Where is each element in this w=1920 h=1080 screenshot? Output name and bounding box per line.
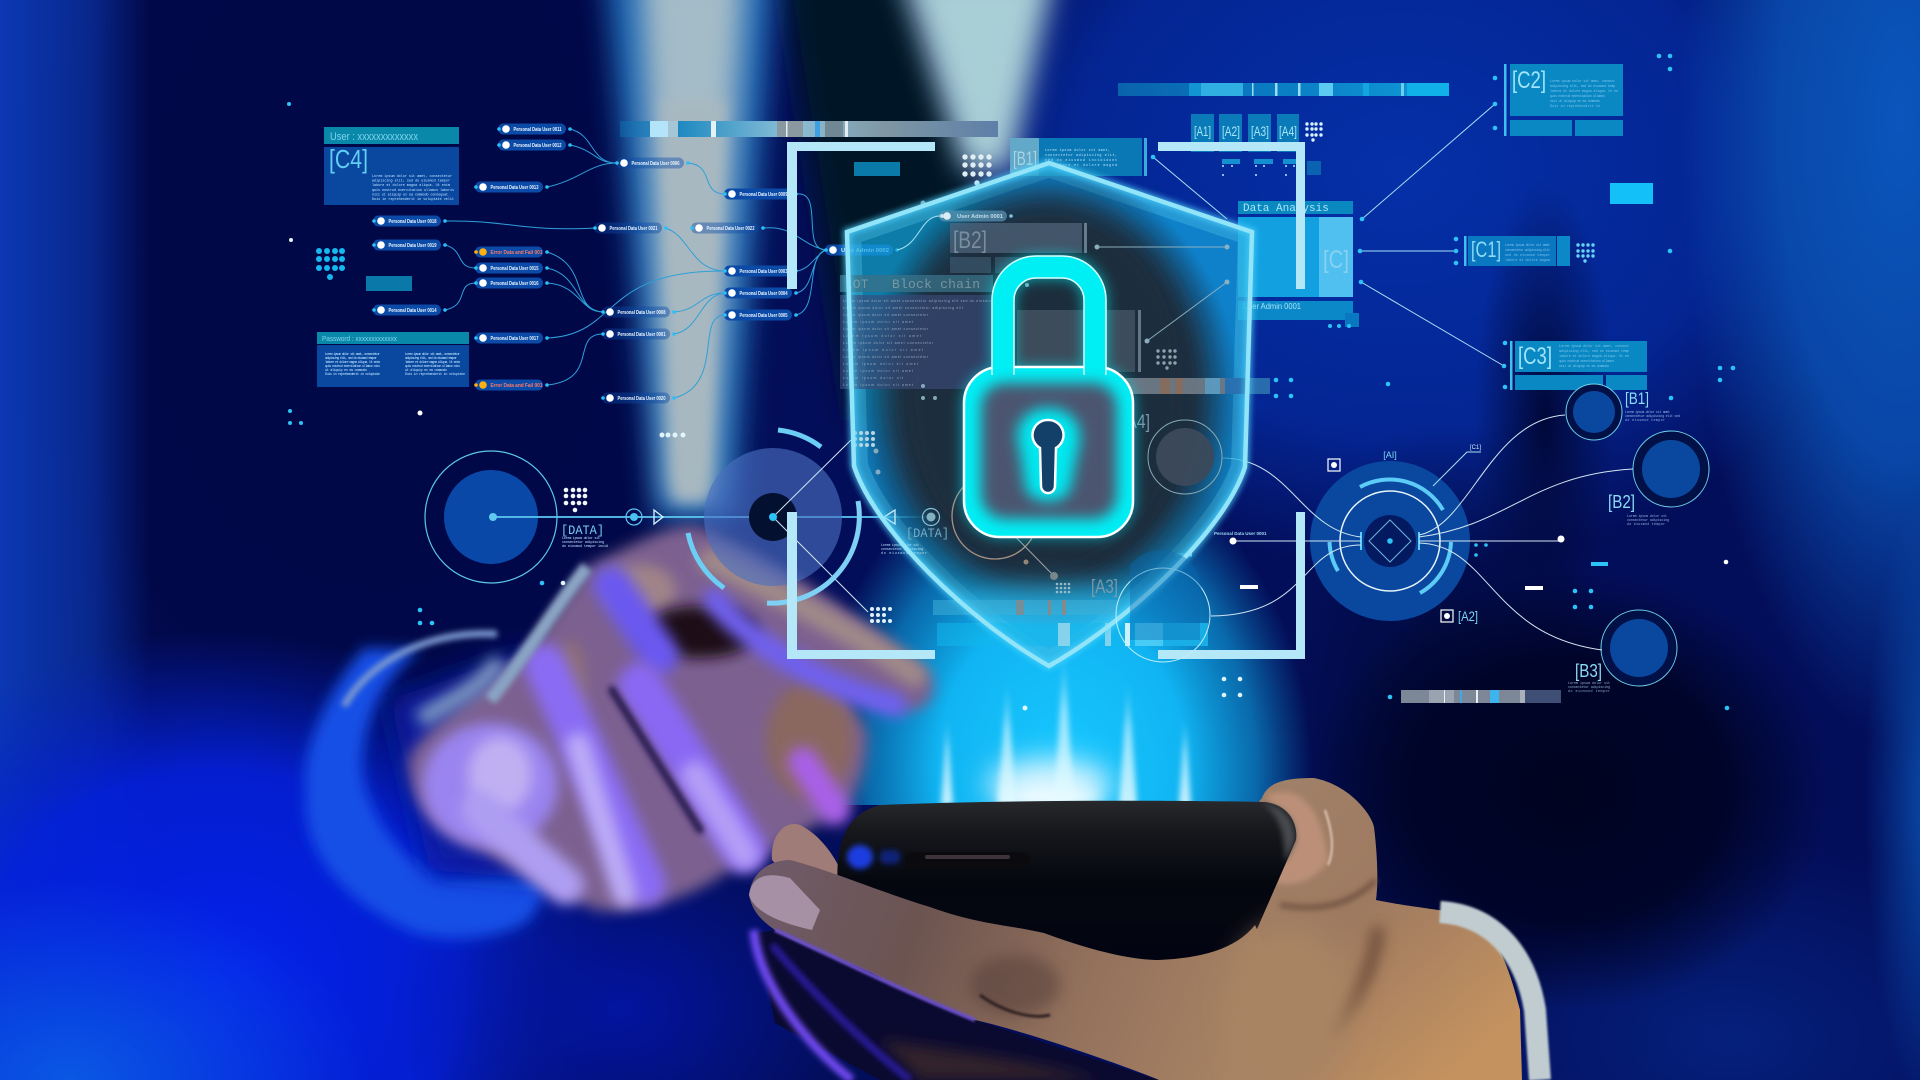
panel: C4 user: nisi ut aliquip ex ea commodo consequat. [372,192,450,198]
connector curves to B nodes: Personal Data User 0001 [1214,531,1267,536]
chart: node B2: [B2] [1608,492,1635,512]
chart: node B2: Lorem ipsum dolor sit [1627,514,1667,519]
labels: A1 to A4: [A4] [1279,123,1297,139]
padlock shackle [992,256,1106,374]
node: Error Data and Fail 001: Error Data and Fail 001 [490,250,542,256]
connector lines from data analysis [1151,104,1504,366]
panel: C2: nisi ut aliquip ex ea commodo [1550,99,1600,104]
chart: left target: Lorem ipsum dolor sit [562,536,600,541]
padlock body [964,367,1133,537]
node: Personal Data User 0005 [723,310,798,320]
connector lines inside shield [1095,245,1229,343]
panel: password: quis nostrud exercitation ullamco nisi [405,364,460,369]
panel: C4 user: labore et dolore magna aliqua. Ut enim [372,183,450,188]
node: Personal Data User 0019 [372,240,447,250]
dashes [1175,553,1608,590]
DATA label inside shield: [DATA] [906,526,949,541]
panel: B1: sed do eiusmod incididunt [1045,158,1117,163]
panel: A3 ghost [1017,310,1141,372]
panel: IoT Block chain: Lorem ipsum dolor sit amet consectetur [843,327,929,331]
panel: IoT Block chain: Lorem ipsum dolor sit amet consectetur [843,313,929,317]
chart: node B1: Lorem ipsum dolor sit amet [1625,410,1670,415]
panel: C2: quis nostrud exercitation ullamco [1550,94,1605,99]
node: Personal Data User 0014 [372,304,447,316]
chart: central target AI [1310,445,1481,621]
panel: IoT Block chain [840,275,1010,389]
padlock body interior [981,383,1117,519]
panel: Data Analysis [1238,201,1359,328]
bar: top right segmented [1118,83,1449,96]
panel: C3: quis nostrud exercitation ullamco [1559,359,1614,364]
node: Personal Data User 0012: Personal Data User 0012 [514,143,562,149]
shackle base patch [993,362,1105,380]
panel: C4 user: adipiscing elit, sed do eiusmod tempor [372,178,450,184]
panel: password: Duis in reprehenderit in voluptate [405,372,465,377]
chart: node B1: consectetur adipiscing elit sed [1625,414,1680,419]
panel: C1: [C1] [1471,237,1501,262]
labels: A1 to A4: [A3] [1251,123,1269,139]
panel: C3: nisi ut aliquip ex ea commodo [1559,364,1609,369]
panel: C4 user: Lorem ipsum dolor sit amet, consectetur [372,174,452,179]
DATA label inside shield: do eiusmod tempor [881,551,927,556]
chart: node B2: consectetur adipiscing [1627,518,1669,523]
panel: password: labore et dolore magna aliqua. Ut enim [325,360,380,365]
node: Personal Data User 0005: Personal Data User 0005 [740,313,788,319]
node: Personal Data User 0004: Personal Data User 0004 [740,291,788,297]
panel: C3 [1502,341,1647,390]
chart: central target AI: [C1] [1470,445,1481,451]
node: Personal Data User 0013: Personal Data User 0013 [490,185,538,191]
panel: B1: [B1] [1013,149,1037,170]
A3 circle and target [952,417,1118,598]
DATA label inside shield: Lorem ipsum dolor sit [881,543,919,548]
panel: C4 user: Duis in reprehenderit in voluptate velit [372,197,454,202]
panel: C1: labore et dolore magna [1505,258,1550,263]
panel: IoT Block chain: Lorem ipsum dolor sit amet consectetur [843,341,934,345]
DATA label inside shield [881,508,949,556]
bar: lower right segmented [1401,690,1561,703]
panel: C2: adipiscing elit, sed do eiusmod temp [1550,84,1615,89]
node: Personal Data User 0017: Personal Data User 0017 [490,336,538,342]
panel: C4 user: User : xxxxxxxxxxxxx [330,131,418,143]
panel: Data Analysis: [C] [1323,246,1349,274]
panel: password: Lorem ipsum dolor sit amet, consectetur [405,352,460,357]
padlock keyhole [1017,408,1080,501]
node: Personal Data User 0018 [372,216,447,226]
node: Personal Data User 0006: Personal Data User 0006 [632,161,680,167]
data node network [372,124,899,404]
panel: IoT Block chain: Block chain [892,277,980,292]
panel: B2 [950,223,1087,273]
left dot grid and block [287,102,422,425]
panel: C1: sed do eiusmod tempor [1505,253,1550,258]
panel: C3: Lorem ipsum dolor sit amet, consect [1559,344,1629,349]
A3 overlap circle [1116,550,1210,662]
panel: C2: [C2] [1512,67,1546,94]
dot grid left of shield [853,431,875,447]
panel: password [317,332,469,387]
panel: IoT Block chain: Lorem ipsum dolor sit amet consectetur adipiscing elit sed do eiusmod [843,299,993,303]
shield outline [847,163,1252,666]
node: Personal Data User 0008 [601,306,676,318]
node: Personal Data User 0006 [615,158,690,168]
node: Personal Data User 0001 [601,328,676,340]
labels: A1 to A4 [1191,114,1323,176]
panel: B1: Lorem ipsum dolor sit amet, [1045,148,1110,153]
hologram light beam [800,450,1320,811]
node: Personal Data User 0017 [474,332,549,344]
panel: C1 [1454,236,1595,266]
connector curves to B nodes [1211,415,1633,650]
panel: IoT Block chain: Lorem ipsum dolor sit [843,376,903,380]
node: User Admin 0001 [939,210,1013,222]
panel: IoT Block chain: Lorem ipsum dolor sit amet consectetur adipiscing elit [843,306,963,310]
node: Personal Data User 0015 [474,262,549,274]
panel: C1: Lorem ipsum dolor sit amet [1505,243,1550,248]
panel: B1: consectetur adipiscing elit, [1045,153,1117,158]
node: Personal Data User 0018: Personal Data User 0018 [388,219,436,225]
small dots inside shield [874,200,1116,517]
node: User Admin 0002 [824,244,899,256]
chart: node B3: do eiusmod tempor [1568,689,1610,694]
chart: left target: [DATA] [561,523,604,538]
dark lower finger area [754,930,1159,1080]
panel: password: Lorem ipsum dolor sit amet, consectetur [325,352,380,357]
node: Personal Data User 0022 [690,222,765,234]
smartphone [837,801,1296,980]
node: Personal Data User 0003 [723,266,798,276]
node: Personal Data User 0022: Personal Data User 0022 [706,226,754,232]
node: Personal Data User 0015: Personal Data User 0015 [490,266,538,272]
thumb and palm behind phone [1150,778,1540,1080]
chart: pointer target [688,430,892,623]
panel: IoT Block chain: Lorem ipsum dolor sit amet [843,362,918,366]
panel: C2: labore et dolore magna aliqua. Ut en [1550,89,1618,94]
dot grid inside shield [1156,349,1177,370]
DATA label inside shield: consectetur adipiscing [881,547,923,552]
panel: password: adipiscing elit, sed do eiusmod tempor [325,356,377,361]
node: Personal Data User 0009 [723,188,798,200]
node: Personal Data User 0021: Personal Data User 0021 [610,226,658,232]
labels: A1 to A4: [A2] [1222,123,1240,139]
panel: C3: adipiscing elit, sed do eiusmod temp [1559,349,1629,354]
markers A2 [1328,459,1478,624]
chart: left target: do eiusmod tempor incid [562,544,608,549]
chart: node B2 [1608,431,1709,527]
faded panels inside shield [840,200,1270,646]
panel: password: adipiscing elit, sed do eiusmod tempor [405,356,457,361]
node: Personal Data User 0012 [497,140,572,150]
panel: password: labore et dolore magna aliqua. Ut enim [405,360,460,365]
bar: top left segmented [620,121,998,137]
A3 circle and target: [A3] [1091,577,1118,598]
panel: password: Password : xxxxxxxxxxxxx [322,334,397,343]
chart: node B3: Lorem ipsum dolor sit [1568,681,1610,686]
panel: B1 [1010,138,1147,176]
node: Personal Data User 0011 [497,124,572,134]
bar: middle segmented [1055,378,1270,394]
bars lower [933,600,1208,646]
bright cyan block [1610,183,1653,204]
node: Personal Data User 0019: Personal Data User 0019 [388,243,436,249]
chart: left target [425,451,1000,583]
panel: IoT Block chain: Lorem ipsum dolor sit amet [843,348,923,352]
node: Personal Data User 0001: Personal Data User 0001 [618,332,666,338]
panel: C3: [C3] [1518,343,1552,370]
chart: node B2: do eiusmod tempor [1627,522,1665,527]
panel: IoT Block chain: IOT [845,277,869,292]
scattered dots [418,54,1735,710]
node: Personal Data User 0011: Personal Data User 0011 [514,127,562,133]
panel: C4 user [324,127,459,205]
hand holding phone [749,860,1350,1080]
A4 circle and label [1122,412,1222,494]
panel: IoT Block chain: Lorem ipsum dolor sit amet [843,369,913,373]
block and dot grid above shield [854,154,992,186]
small finger behind phone [772,824,845,880]
panel: password: Duis in reprehenderit in voluptate [325,372,380,377]
chart: node B3: consectetur adipiscing [1568,685,1610,690]
chart: node B3: [B3] [1575,661,1602,681]
markers A2: [A2] [1458,608,1478,624]
panel: C2: Duis in reprehenderit in [1550,104,1600,109]
panel: C4 user: quis nostrud exercitation ullamco laboris [372,188,454,193]
node: Personal Data User 0008: Personal Data User 0008 [618,310,666,316]
panel: IoT Block chain: Lorem ipsum dolor sit amet consectetur [843,355,929,359]
background: shirt and tie [605,0,1055,520]
panel: IoT Block chain: Lorem ipsum dolor sit amet [843,320,913,324]
node: Personal Data User 0009: Personal Data User 0009 [740,192,788,198]
chart: node B1 [1566,384,1680,440]
panel: password: ut aliquip ex ea commodo [405,368,447,373]
panel: IoT Block chain: Lorem ipsum dolor sit amet [843,334,921,338]
A4 circle and label: [A4] [1122,412,1150,433]
panel: C3: labore et dolore magna aliqua. Ut en [1559,354,1629,359]
node: Personal Data User 0014: Personal Data User 0014 [388,308,437,314]
panel: IoT Block chain: Lorem ipsum dolor sit amet [843,383,913,387]
node: Error Data and Fail 001 lower: Error Data and Fail 001 [490,383,542,389]
node: Personal Data User 0021 [593,222,668,234]
bracket frame [787,142,1305,659]
panel: password: ut aliquip ex ea commodo [325,368,367,373]
node: Personal Data User 0016 [474,278,549,288]
node: Personal Data User 0016: Personal Data User 0016 [490,281,538,287]
panel: Data Analysis: Data Analysis [1243,203,1329,215]
node: Personal Data User 0004 [723,288,798,298]
panel: Data Analysis: User Admin 0001 [1243,301,1301,311]
icon: padlock [963,256,1134,537]
node: Error Data and Fail 001 [474,246,549,258]
panel: B1: ut labore et dolore magna [1045,163,1117,168]
labels: A1 to A4: [A1] [1194,123,1211,139]
connector to User Admin 0001 [897,216,940,250]
chart: central target AI: [AI] [1383,450,1397,460]
chart: node B1: do eiusmod tempor [1625,418,1665,423]
node: Error Data and Fail 001 lower [474,380,549,390]
blurred sleeve cuff [305,648,560,938]
chart: node B3 [1568,610,1677,694]
panel: C2: Lorem ipsum dolor sit amet, consect [1550,79,1615,84]
panel: password: quis nostrud exercitation ullamco nisi [325,364,380,369]
panel: C4 user: [C4] [329,144,368,174]
panel: B2: [B2] [953,227,987,254]
chart: left target: consectetur adipiscing [562,540,604,545]
chart: node B1: [B1] [1625,389,1649,408]
panel: C1: consectetur adipiscing elit [1505,248,1550,253]
node: User Admin 0001: User Admin 0001 [957,214,1003,220]
node: Personal Data User 0013 [474,182,549,192]
panel: C2 [1493,64,1623,136]
node: Personal Data User 0003: Personal Data User 0003 [740,269,788,275]
node: Personal Data User 0020: Personal Data User 0020 [618,396,666,402]
node: User Admin 0002: User Admin 0002 [841,248,889,254]
blurred pointing hand [344,526,933,911]
node: Personal Data User 0020 [601,392,676,404]
icon: security shield [847,163,1252,695]
network connectors [445,129,826,398]
